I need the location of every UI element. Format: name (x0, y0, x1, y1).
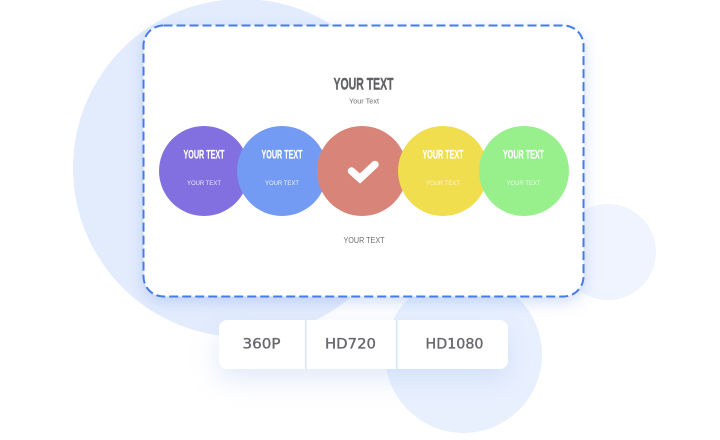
circle: blue: YOUR TEXT (262, 148, 303, 162)
caption: YOUR TEXT (344, 236, 385, 245)
panel: resolution selector (219, 320, 508, 369)
label: HD720: HD720 (325, 336, 376, 352)
heading: YOUR TEXT (334, 74, 394, 94)
label: HD1080: HD1080 (426, 336, 484, 352)
circle: blue (237, 126, 327, 216)
circle: green: YOUR TEXT (506, 180, 541, 187)
label: 360P: 360P (242, 336, 280, 352)
circle: purple (159, 126, 249, 216)
circle: purple: YOUR TEXT (187, 180, 221, 187)
circle: blue: YOUR TEXT (265, 180, 299, 187)
circle: green (479, 126, 569, 216)
subheading: Your Text (349, 96, 380, 106)
circle: yellow (398, 126, 488, 216)
circle: yellow: YOUR TEXT (426, 180, 460, 187)
circle: red with check (317, 126, 407, 216)
background circle: large (73, 0, 411, 337)
circle: purple: YOUR TEXT (184, 148, 225, 162)
background circle: right (560, 204, 656, 300)
icon: check mark (352, 164, 375, 178)
panel: dashed preview card (144, 26, 584, 296)
circle: yellow: YOUR TEXT (422, 148, 464, 162)
background circle: bottom (385, 276, 542, 433)
circle: green: YOUR TEXT (503, 148, 544, 162)
